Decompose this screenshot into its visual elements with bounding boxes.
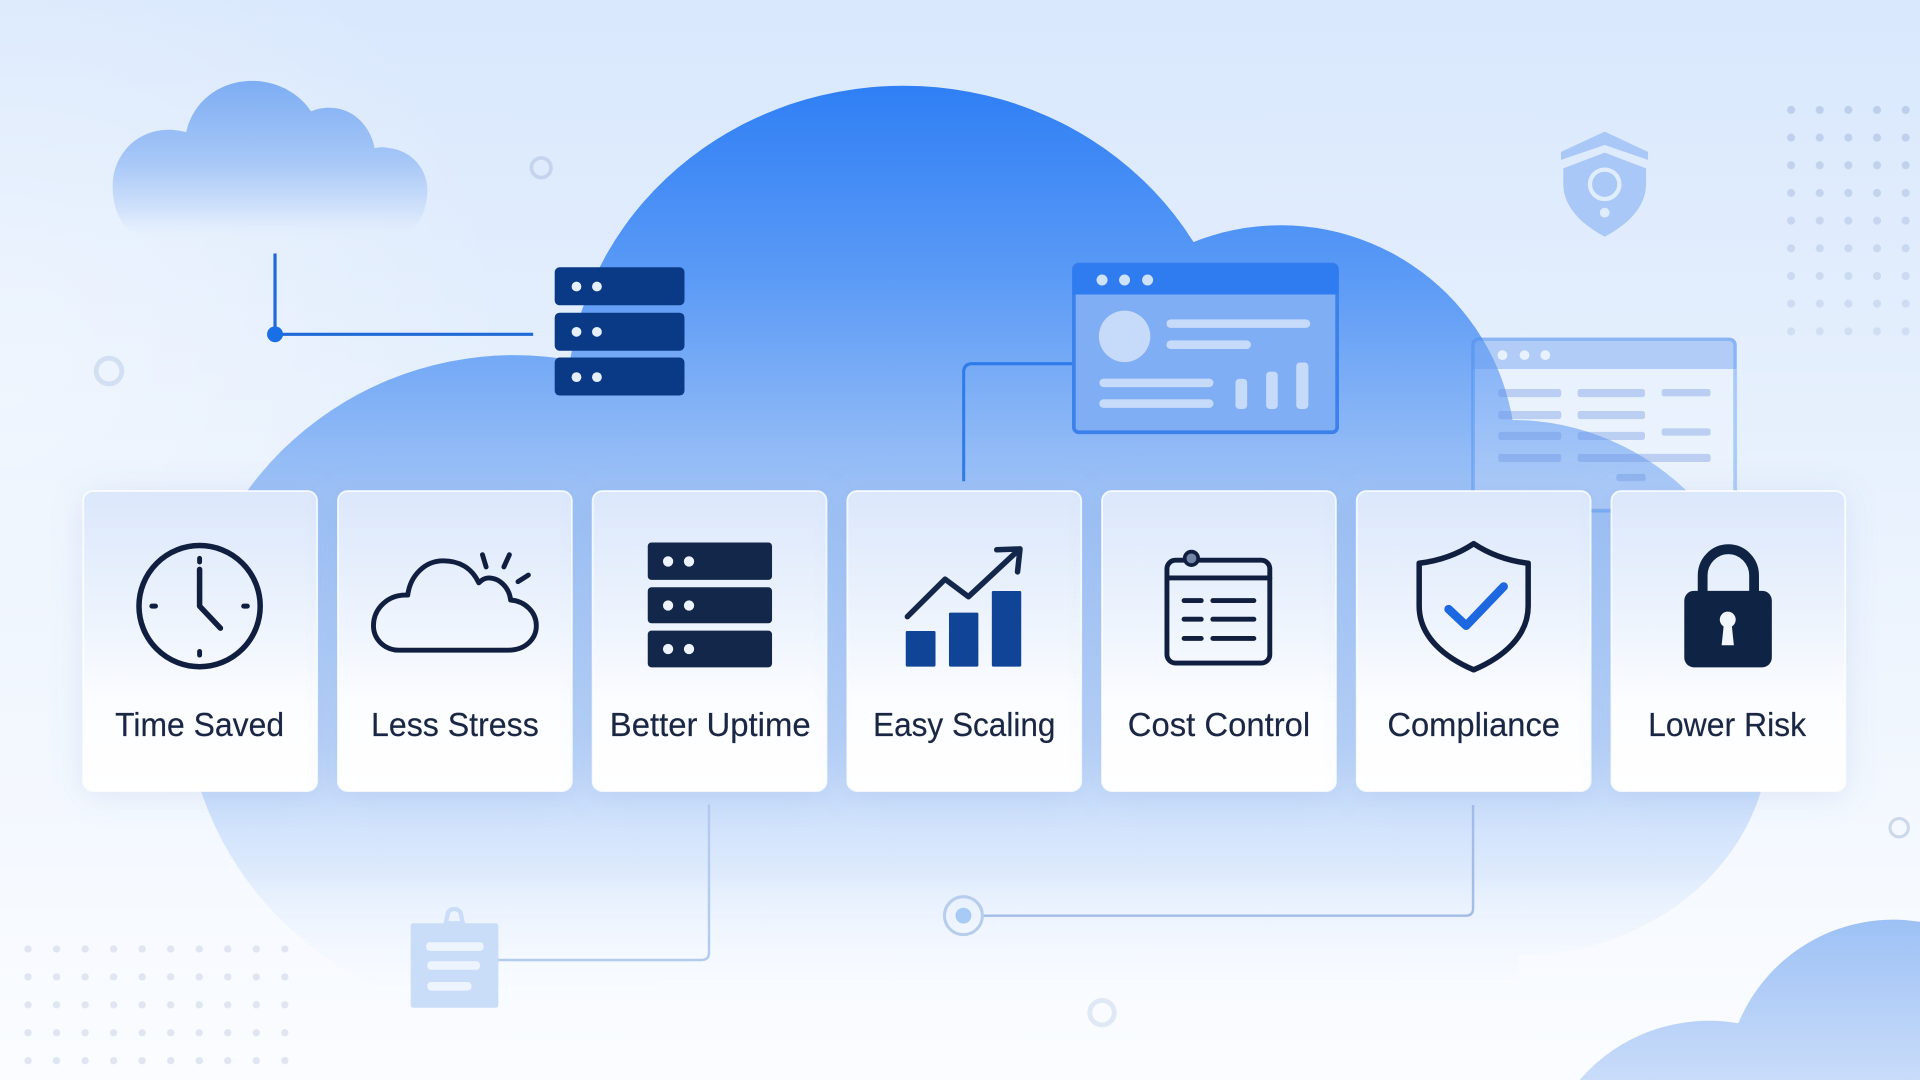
label: Better Uptime xyxy=(610,707,811,744)
dot grid bottom left xyxy=(14,935,299,1075)
icon: target node xyxy=(944,897,982,935)
card: compliance xyxy=(1357,491,1591,791)
card: time saved xyxy=(83,491,317,791)
icon: clipboard list xyxy=(1167,552,1270,663)
dot grid top right xyxy=(1787,106,1910,336)
bottom-right cloud xyxy=(1580,920,1920,1080)
icon: shield with check xyxy=(1419,544,1528,670)
top-left faded cloud xyxy=(113,81,427,241)
connector: node to server xyxy=(267,253,533,342)
icon: padlock xyxy=(1684,549,1772,667)
label: Compliance xyxy=(1387,707,1560,744)
cards row xyxy=(83,491,1845,791)
label: Less Stress xyxy=(371,707,539,744)
card: less stress xyxy=(338,491,572,791)
connector: better uptime to clipboard xyxy=(497,804,709,960)
dashboard window xyxy=(1073,263,1338,432)
label: Cost Control xyxy=(1128,707,1310,744)
card: easy scaling xyxy=(847,491,1081,791)
icon: faded clipboard xyxy=(411,909,498,1008)
label: Time Saved xyxy=(115,707,284,744)
card: cost control xyxy=(1102,491,1336,791)
card: lower risk xyxy=(1611,491,1845,791)
connector: compliance to target node xyxy=(983,805,1473,916)
icon: dark server stack xyxy=(648,542,772,667)
icon: blue server stack xyxy=(555,267,684,396)
icon: cloud with sun rays xyxy=(373,555,536,650)
icon: faded shield top right xyxy=(1561,132,1648,237)
small decorative rings xyxy=(96,158,1908,1025)
card: better uptime xyxy=(593,491,827,791)
label: Lower Risk xyxy=(1648,707,1807,744)
icon: clock xyxy=(139,546,260,667)
icon: growth chart xyxy=(906,549,1021,667)
label: Easy Scaling xyxy=(873,707,1056,744)
connector: dashboard to easy scaling xyxy=(964,364,1074,481)
faded table window xyxy=(1472,338,1736,511)
big central cloud xyxy=(202,86,1761,928)
